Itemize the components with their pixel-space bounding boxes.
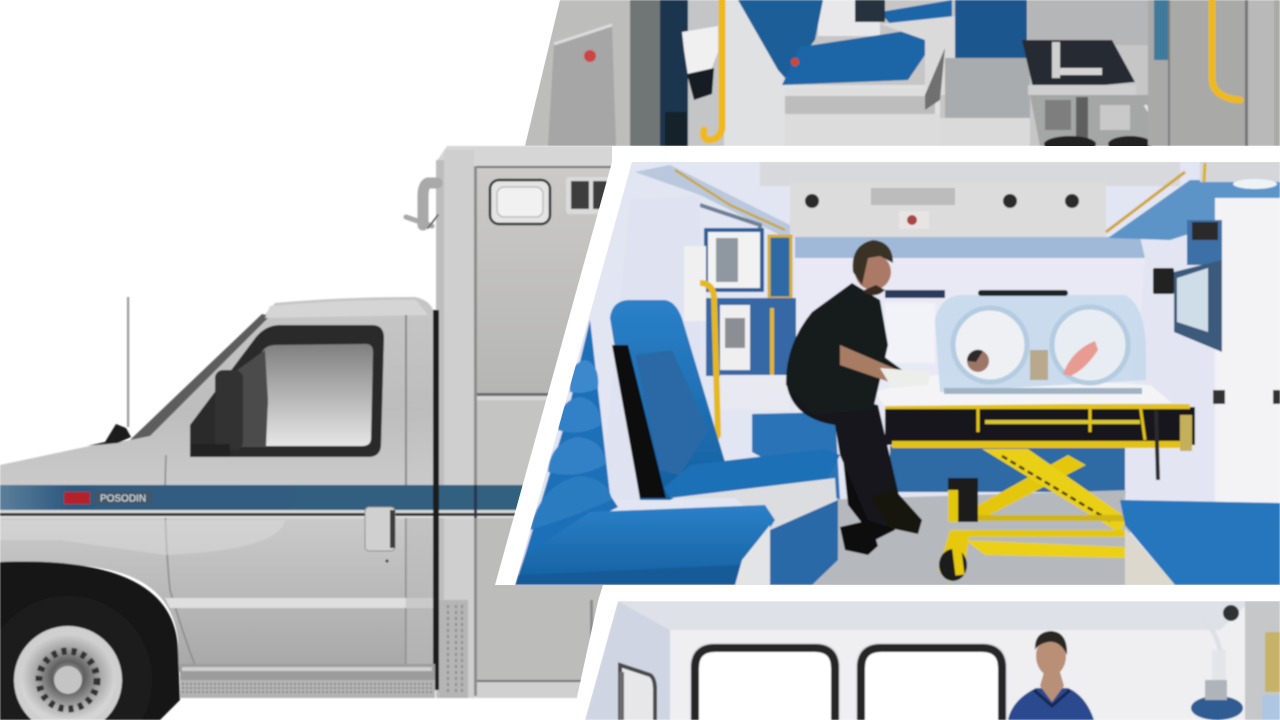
box clearance lights xyxy=(566,177,608,214)
panel: main interior photo with paramedic and neonatal incubator xyxy=(510,160,1280,590)
stretcher wheels xyxy=(938,530,970,582)
back wall xyxy=(795,258,1165,418)
foreground seat xyxy=(515,320,775,585)
right column xyxy=(1245,601,1280,720)
left small window xyxy=(619,665,655,720)
stretcher frame xyxy=(885,404,1195,480)
rear-view mirror bracket xyxy=(406,183,438,228)
rear pillar xyxy=(433,310,468,698)
upper white gap xyxy=(818,0,880,36)
left cabinet xyxy=(520,0,632,146)
ambulance exterior side view xyxy=(0,146,647,720)
yellow grab rail xyxy=(704,0,722,140)
yellow grab rail xyxy=(700,283,718,446)
floor xyxy=(940,58,1030,146)
clear cover xyxy=(1028,0,1155,45)
panel: bottom interior photo xyxy=(580,601,1280,720)
door handle xyxy=(365,507,395,562)
equipment cabinets xyxy=(684,227,798,377)
second seat xyxy=(855,0,960,95)
transport incubator xyxy=(885,290,1146,394)
blue box behind paramedic xyxy=(752,412,840,500)
side mirror xyxy=(190,350,268,457)
linen under incubator xyxy=(875,375,1172,406)
left wall xyxy=(585,601,670,720)
blue seat xyxy=(738,0,925,85)
wall monitor xyxy=(1174,260,1222,352)
dark door column xyxy=(630,0,718,146)
left upper shelf xyxy=(635,165,790,240)
windshield wiper xyxy=(87,424,131,446)
floor xyxy=(805,490,1130,585)
left wall xyxy=(699,206,701,207)
front wheel xyxy=(0,562,180,720)
upper cabinet wall xyxy=(760,162,1180,238)
tall blue seat xyxy=(610,300,728,500)
right upper blue cabinet xyxy=(1106,162,1280,240)
right yellow rail xyxy=(1212,0,1240,100)
cab body xyxy=(0,297,434,672)
side badge: POSODIN xyxy=(100,494,146,504)
panel: top interior photo xyxy=(520,0,1280,152)
baby xyxy=(967,341,1098,376)
rear door windows xyxy=(690,643,1007,720)
seat base lip xyxy=(784,48,946,115)
side badge xyxy=(64,491,152,504)
antenna xyxy=(127,297,129,427)
right bench xyxy=(1120,500,1280,585)
right equipment xyxy=(1191,605,1243,720)
ceiling band xyxy=(618,601,1250,630)
box marker light xyxy=(490,180,550,224)
box body xyxy=(436,146,647,698)
paramedic xyxy=(786,240,930,555)
right wall xyxy=(1148,0,1280,146)
dark blue cabinet xyxy=(955,0,1027,58)
scissor lift xyxy=(948,449,1127,558)
white wall base xyxy=(724,0,940,146)
medical staff member xyxy=(1008,631,1094,720)
blue shelf band xyxy=(795,237,1145,258)
cab door window xyxy=(190,325,384,457)
right wall and cabinet xyxy=(1125,198,1280,508)
running board xyxy=(180,664,435,698)
side stripe xyxy=(0,485,560,518)
stretcher xyxy=(1022,39,1152,146)
tall seat cushion xyxy=(664,449,840,498)
back wall lower blue xyxy=(890,446,1125,492)
tall seat base xyxy=(670,478,838,585)
